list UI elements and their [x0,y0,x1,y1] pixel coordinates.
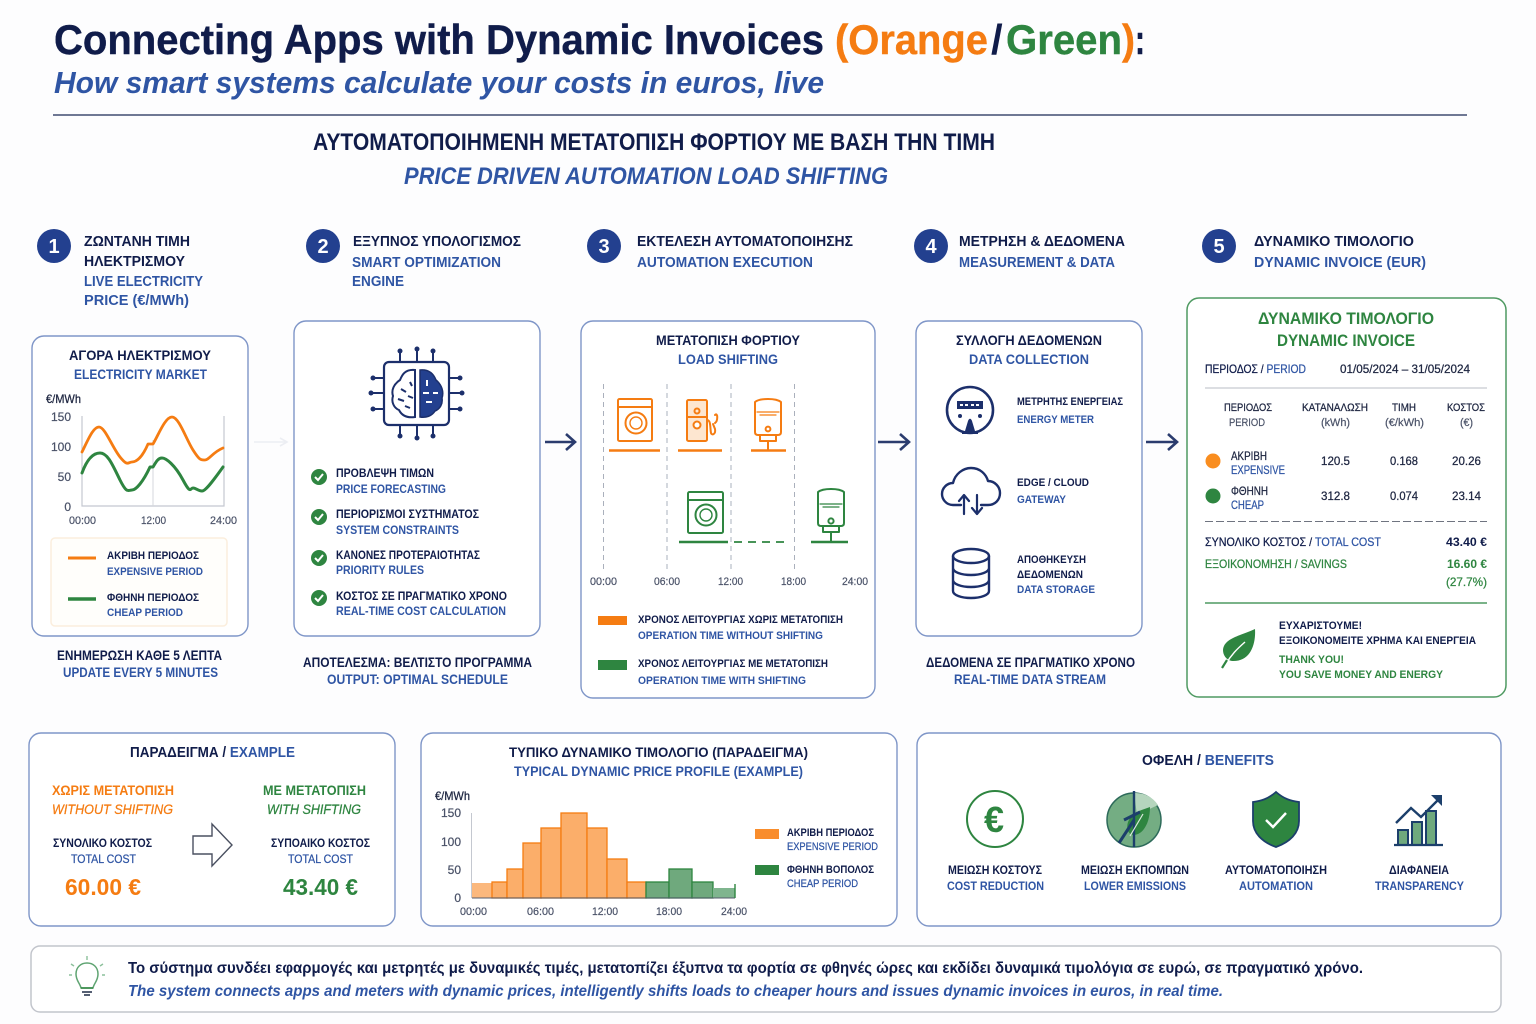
invoice totals: ΣΥΝΟΛΙΚΟ ΚΟΣΤΟΣ / TOTAL COST [1205,535,1382,549]
axis: time labels [590,576,868,588]
panel: optimization engine [294,321,540,636]
bar chart: price profile: €/MWh [435,789,470,803]
column: without shifting: ΣΥΝΟΛΙΚΟ ΚΟΣΤΟΣ [53,836,152,850]
panel: dynamic invoice: ΔΥΝΑΜΙΚΟ ΤΙΜΟΛΟΓΙΟ [1258,310,1434,328]
text: gateway [1017,477,1089,506]
benefit: cost reduction: COST REDUCTION [947,879,1044,893]
line chart: market prices: 100 [51,440,71,454]
step 5 heading: 5 [1213,236,1225,258]
invoice table [1206,402,1485,512]
legend: price periods [755,827,878,890]
step 3 heading: AUTOMATION EXECUTION [637,255,813,271]
invoice table: PERIOD [1229,417,1265,429]
line chart: market prices: 50 [58,470,71,484]
thank you note: ΕΞΟΙΚΟΝΟΜΕΙΤΕ ΧΡΗΜΑ ΚΑΙ ΕΝΕΡΓΕΙΑ [1279,635,1476,647]
benefit: transparency: TRANSPARENCY [1375,879,1464,893]
panel: data collection: DATA COLLECTION [969,352,1089,367]
axis: time labels: 06:00 [654,576,680,588]
text: summary [128,960,1363,1000]
text: data storage [1017,554,1095,596]
invoice totals [1205,535,1487,589]
benefit: automation: ΑΥΤΟΜΑΤΟΠΟΙΗΣΗ [1225,863,1327,877]
list: engine inputs: ΠΕΡΙΟΡΙΣΜΟΙ ΣΥΣΤΗΜΑΤΟΣ [336,507,479,521]
column: without shifting: WITHOUT SHIFTING [52,802,173,817]
caption: real-time stream: ΔΕΔΟΜΕΝΑ ΣΕ ΠΡΑΓΜΑΤΙΚΟ ΧΡΟΝΟ [926,655,1135,670]
step 5 heading: ΔΥΝΑΜΙΚΟ ΤΙΜΟΛΟΓΙΟ [1254,234,1414,250]
step 1 heading: 1 [48,236,60,258]
legend: price periods: CHEAP PERIOD [787,878,858,890]
step 5 heading [1202,229,1426,271]
caption: optimal schedule: OUTPUT: OPTIMAL SCHEDULE [327,672,508,687]
benefit: transparency [1375,795,1464,893]
invoice table: ΑΚΡΙΒΗ [1231,449,1267,463]
step 4 heading [914,229,1126,271]
bar chart: price profile: 06:00 [527,906,554,918]
list: engine inputs: SYSTEM CONSTRAINTS [336,523,459,537]
column: without shifting [52,783,174,900]
panel: benefits [917,733,1501,926]
benefit: automation [1225,792,1327,893]
invoice table: CHEAP [1231,498,1264,512]
axis: time labels: 18:00 [781,576,806,588]
column: with shifting: WITH SHIFTING [267,802,361,817]
title: Connecting Apps with Dynamic Invoices [54,16,824,63]
list: engine inputs: ΠΡΟΒΛΕΨΗ ΤΙΜΩΝ [336,466,434,480]
panel: data collection [916,321,1142,636]
text: data storage: ΑΠΟΘΗΚΕΥΣΗ [1017,554,1086,566]
step 3 heading: ΕΚΤΕΛΕΣΗ ΑΥΤΟΜΑΤΟΠΟΙΗΣΗΣ [637,234,853,250]
step 1 heading: PRICE (€/MWh) [84,293,189,309]
panel: electricity market: ELECTRICITY MARKET [74,367,208,382]
list: engine inputs: REAL-TIME COST CALCULATION [336,604,506,618]
line chart: market prices: €/MWh [46,392,81,406]
axis: time labels: 00:00 [590,576,617,588]
step 3 heading: 3 [598,236,610,258]
line chart: market prices: 0 [64,500,71,514]
legend: operation time [598,614,843,687]
step 5 heading: DYNAMIC INVOICE (EUR) [1254,255,1426,271]
legend: operation time: OPERATION TIME WITHOUT SHIFTING [638,630,823,642]
invoice table: ΚΟΣΤΟΣ [1447,402,1485,414]
bar chart: price profile: 24:00 [721,906,747,918]
text: summary: Το σύστημα συνδέει εφαρμογές και μετρητές με δυναμικές τιμές, μετατοπίζει έξυπνα τα φορτία σε φθηνές ώρες και εκδίδει δυναμικά τιμολόγια σε ευρώ, σε πραγματικό χρόνο. [128,960,1363,977]
list: engine inputs: ΚΟΣΤΟΣ ΣΕ ΠΡΑΓΜΑΤΙΚΟ ΧΡΟΝΟ [336,589,507,603]
text: gateway: GATEWAY [1017,494,1067,506]
legend: operation time: ΧΡΟΝΟΣ ΛΕΙΤΟΥΡΓΙΑΣ ΧΩΡΙΣ ΜΕΤΑΤΟΠΙΣΗ [638,614,843,626]
legend: market periods: ΑΚΡΙΒΗ ΠΕΡΙΟΔΟΣ [107,550,199,562]
benefit: automation: AUTOMATION [1239,879,1313,893]
thank you note: ΕΥΧΑΡΙΣΤΟΥΜΕ! [1279,620,1362,632]
invoice totals: 43.40 € [1446,535,1487,549]
benefit: cost reduction: ΜΕΙΩΣΗ ΚΟΣΤΟΥΣ [948,863,1042,877]
column: without shifting: 60.00 € [65,874,141,900]
column: without shifting: ΧΩΡΙΣ ΜΕΤΑΤΟΠΙΣΗ [52,783,174,798]
panel: example: ΠΑΡΑΔΕΙΓΜΑ / EXAMPLE [130,745,295,761]
invoice table: 0.074 [1390,489,1418,503]
column: with shifting: ΜΕ ΜΕΤΑΤΟΠΙΣΗ [263,783,366,798]
panel: benefits: ΟΦΕΛΗ / BENEFITS [1142,753,1274,769]
icon: fuel pump orange [687,400,717,441]
line chart: market prices: 150 [51,410,71,424]
thank you note [1279,620,1476,681]
title: Green [1006,16,1122,63]
benefit: cost reduction [947,791,1044,893]
benefit: lower emissions: LOWER EMISSIONS [1084,879,1186,893]
legend: price periods: ΦΘΗΝΗ ΒΟΠΟΛΟΣ [787,864,874,876]
line chart: market prices: 12:00 [141,515,166,527]
bar chart: price profile: 12:00 [592,906,618,918]
title: : [1135,16,1145,63]
invoice table: ΤΙΜΗ [1392,402,1416,414]
section heading: ΑΥΤΟΜΑΤΟΠΟΙΗΜΕΝΗ ΜΕΤΑΤΟΠΙΣΗ ΦΟΡΤΙΟΥ ΜΕ ΒΑΣΗ ΤΗΝ ΤΙΜΗ [313,129,995,156]
list: engine inputs: ΚΑΝΟΝΕΣ ΠΡΟΤΕΡΑΙΟΤΗΤΑΣ [336,548,480,562]
icon: light bulb [69,956,105,995]
arrow: step 2 to 3 [545,434,575,450]
step 1 heading: LIVE ELECTRICITY [84,274,203,290]
caption: optimal schedule: ΑΠΟΤΕΛΕΣΜΑ: ΒΕΛΤΙΣΤΟ ΠΡΟΓΡΑΜΜΑ [303,655,532,670]
text: summary: The system connects apps and meters with dynamic prices, intelligently shifts loads to cheaper hours and issues dynamic invoices in euros, in real time. [128,983,1223,1000]
step 1 heading [37,229,203,309]
caption: update frequency: ΕΝΗΜΕΡΩΣΗ ΚΑΘΕ 5 ΛΕΠΤΑ [57,648,222,663]
title: ) [1122,16,1135,63]
bar chart: price profile: 18:00 [656,906,682,918]
icon: energy meter [947,387,993,434]
bars: time with shifting [679,541,848,543]
caption: update frequency [57,648,222,680]
icon: washing machine orange [618,399,652,441]
list: engine inputs: PRIORITY RULES [336,563,424,577]
benefit: transparency: ΔΙΑΦΑΝΕΙΑ [1389,863,1449,877]
invoice table: 0.168 [1390,454,1418,468]
text: energy meter: ΜΕΤΡΗΤΗΣ ΕΝΕΡΓΕΙΑΣ [1017,396,1123,408]
benefit: cost reduction: € [984,799,1004,840]
bar chart: price profile: 100 [441,835,461,849]
title: / [991,16,1003,63]
step 2 heading: 2 [317,236,329,258]
caption: update frequency: UPDATE EVERY 5 MINUTES [63,665,218,680]
invoice period: 01/05/2024 – 31/05/2024 [1340,362,1470,376]
invoice table: (€/kWh) [1385,417,1424,429]
bar chart: price profile: 150 [441,806,461,820]
panel: load shifting: ΜΕΤΑΤΟΠΙΣΗ ΦΟΡΤΙΟΥ [656,333,800,348]
section heading [313,129,995,190]
axis: time labels: 24:00 [842,576,868,588]
text: data storage: ΔΕΔΟΜΕΝΩΝ [1017,569,1083,581]
legend: price periods: ΑΚΡΙΒΗ ΠΕΡΙΟΔΟΣ [787,827,874,839]
step 4 heading: ΜΕΤΡΗΣΗ & ΔΕΔΟΜΕΝΑ [959,234,1126,250]
legend: market periods: ΦΘΗΝΗ ΠΕΡΙΟΔΟΣ [107,592,199,604]
panel: electricity market [32,336,248,636]
step 4 heading: 4 [925,236,937,258]
benefit: lower emissions: ΜΕΙΩΣΗ ΕΚΠΟΜΠΩΝ [1081,863,1189,877]
column: with shifting: TOTAL COST [288,852,354,866]
invoice table: 20.26 [1452,454,1481,468]
column: with shifting [263,783,370,900]
invoice table: (€) [1460,417,1473,429]
bar chart: price profile [435,789,747,918]
invoice table: 23.14 [1452,489,1481,503]
list: engine inputs [311,466,507,618]
legend: operation time: ΧΡΟΝΟΣ ΛΕΙΤΟΥΡΓΙΑΣ ΜΕ ΜΕΤΑΤΟΠΙΣΗ [638,658,828,670]
arrow: step 4 to 5 [1146,434,1177,450]
step 3 heading [587,229,853,271]
step 4 heading: MEASUREMENT & DATA [959,255,1115,271]
icon: brain chip [368,346,464,440]
step 1 heading: ΗΛΕΚΤΡΙΣΜΟΥ [84,254,185,270]
panel: footer summary [31,946,1501,1012]
panel: electricity market: ΑΓΟΡΑ ΗΛΕΚΤΡΙΣΜΟΥ [69,348,211,363]
panel: typical price profile: TYPICAL DYNAMIC PRICE PROFILE (EXAMPLE) [514,764,803,779]
icon: washing machine green [688,492,723,533]
icon: data storage [953,549,989,598]
subtitle: How smart systems calculate your costs in euros, live [54,65,824,100]
legend: market periods: CHEAP PERIOD [107,607,183,619]
invoice totals: ΕΞΟΙΚΟΝΟΜΗΣΗ / SAVINGS [1205,557,1347,571]
invoice table: (kWh) [1321,417,1350,429]
text: data storage: DATA STORAGE [1017,584,1095,596]
legend: operation time: OPERATION TIME WITH SHIFTING [638,675,806,687]
thank you note: YOU SAVE MONEY AND ENERGY [1279,669,1444,681]
icon: leaf [1222,629,1255,668]
bar chart: price profile: 50 [448,863,461,877]
step 2 heading: ENGINE [352,274,404,290]
panel: data collection: ΣΥΛΛΟΓΗ ΔΕΔΟΜΕΝΩΝ [956,333,1102,348]
panel: load shifting [581,321,875,698]
text: energy meter: ENERGY METER [1017,414,1094,426]
invoice totals: 16.60 € [1447,557,1487,571]
icon: water heater orange [755,399,781,450]
icon: water heater green [818,489,844,542]
list: engine inputs: PRICE FORECASTING [336,482,446,496]
legend: price periods: EXPENSIVE PERIOD [787,841,878,853]
invoice table: EXPENSIVE [1231,463,1285,477]
step 2 heading [306,229,521,290]
line chart: market prices: 24:00 [210,515,237,527]
invoice table: ΦΘΗΝΗ [1231,484,1268,498]
benefit: lower emissions [1081,791,1189,893]
section heading: PRICE DRIVEN AUTOMATION LOAD SHIFTING [404,163,888,190]
legend: market periods: EXPENSIVE PERIOD [107,566,203,578]
caption: real-time stream: REAL-TIME DATA STREAM [954,672,1106,687]
legend: market periods [51,538,227,626]
panel: example [29,733,395,926]
step 2 heading: ΕΞΥΠΝΟΣ ΥΠΟΛΟΓΙΣΜΟΣ [353,234,521,250]
column: with shifting: ΣΥΠΟΑΙΚΟ ΚΟΣΤΟΣ [271,836,370,850]
line chart: market prices [46,392,237,527]
panel: load shifting: LOAD SHIFTING [678,352,778,367]
thank you note: THANK YOU! [1279,654,1344,666]
panel: dynamic invoice: DYNAMIC INVOICE [1277,332,1415,350]
column: without shifting: TOTAL COST [71,852,137,866]
invoice period [1205,362,1470,376]
step 2 heading: SMART OPTIMIZATION [352,255,501,271]
invoice table: 120.5 [1321,454,1350,468]
text: gateway: EDGE / CLOUD [1017,477,1089,489]
panel: typical price profile [421,733,897,926]
arrow: step 3 to 4 [878,434,909,450]
bar chart: price profile: 00:00 [460,906,487,918]
icon: cloud gateway [942,468,1000,514]
invoice table: ΠΕΡΙΟΔΟΣ [1224,402,1272,414]
title: (Orange [835,16,988,63]
axis: time labels: 12:00 [718,576,743,588]
invoice table: ΚΑΤΑΝΑΛΩΣΗ [1302,402,1368,414]
line chart: market prices: 00:00 [69,515,96,527]
arrow: faint step 1 to 2 [254,438,287,446]
text: energy meter [1017,396,1123,426]
caption: optimal schedule [303,655,532,687]
step 1 heading: ΖΩΝΤΑΝΗ ΤΙΜΗ [84,234,190,250]
bars: time without shifting [609,449,786,452]
arrow: comparison [193,824,232,866]
invoice period: ΠΕΡΙΟΔΟΣ / PERIOD [1205,362,1306,376]
bar chart: price profile: 0 [454,891,461,905]
column: with shifting: 43.40 € [283,874,358,900]
panel: typical price profile: ΤΥΠΙΚΟ ΔΥΝΑΜΙΚΟ ΤΙΜΟΛΟΓΙΟ (ΠΑΡΑΔΕΙΓΜΑ) [509,745,808,760]
caption: real-time stream [926,655,1135,687]
invoice table: 312.8 [1321,489,1350,503]
panel: dynamic invoice [1187,298,1506,697]
invoice totals: (27.7%) [1446,575,1487,589]
